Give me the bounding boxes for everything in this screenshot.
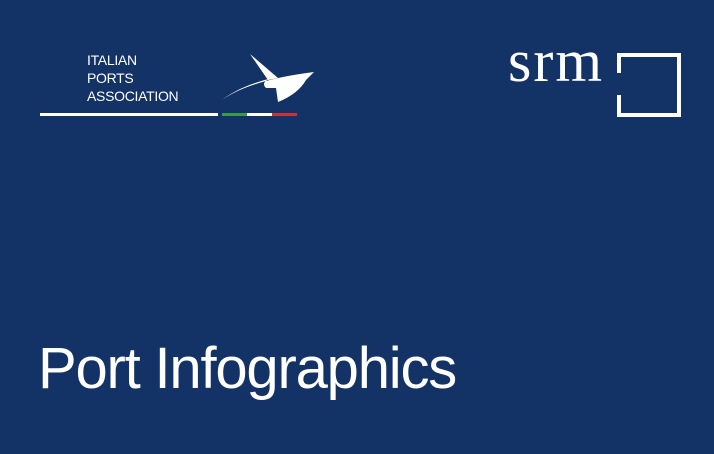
logo text: ASSOCIATION bbox=[87, 88, 178, 104]
logo text: ITALIAN bbox=[87, 52, 137, 68]
logo text bbox=[87, 52, 178, 104]
icon: ship bbox=[222, 54, 314, 102]
tricolor line bbox=[40, 113, 218, 116]
srm text: srm bbox=[508, 28, 604, 94]
logo text: PORTS bbox=[87, 70, 133, 86]
logo: italian ports association bbox=[40, 52, 314, 116]
icon: open square bbox=[617, 53, 681, 117]
logo: srm bbox=[508, 28, 681, 117]
title: Port Infographics bbox=[38, 336, 456, 401]
